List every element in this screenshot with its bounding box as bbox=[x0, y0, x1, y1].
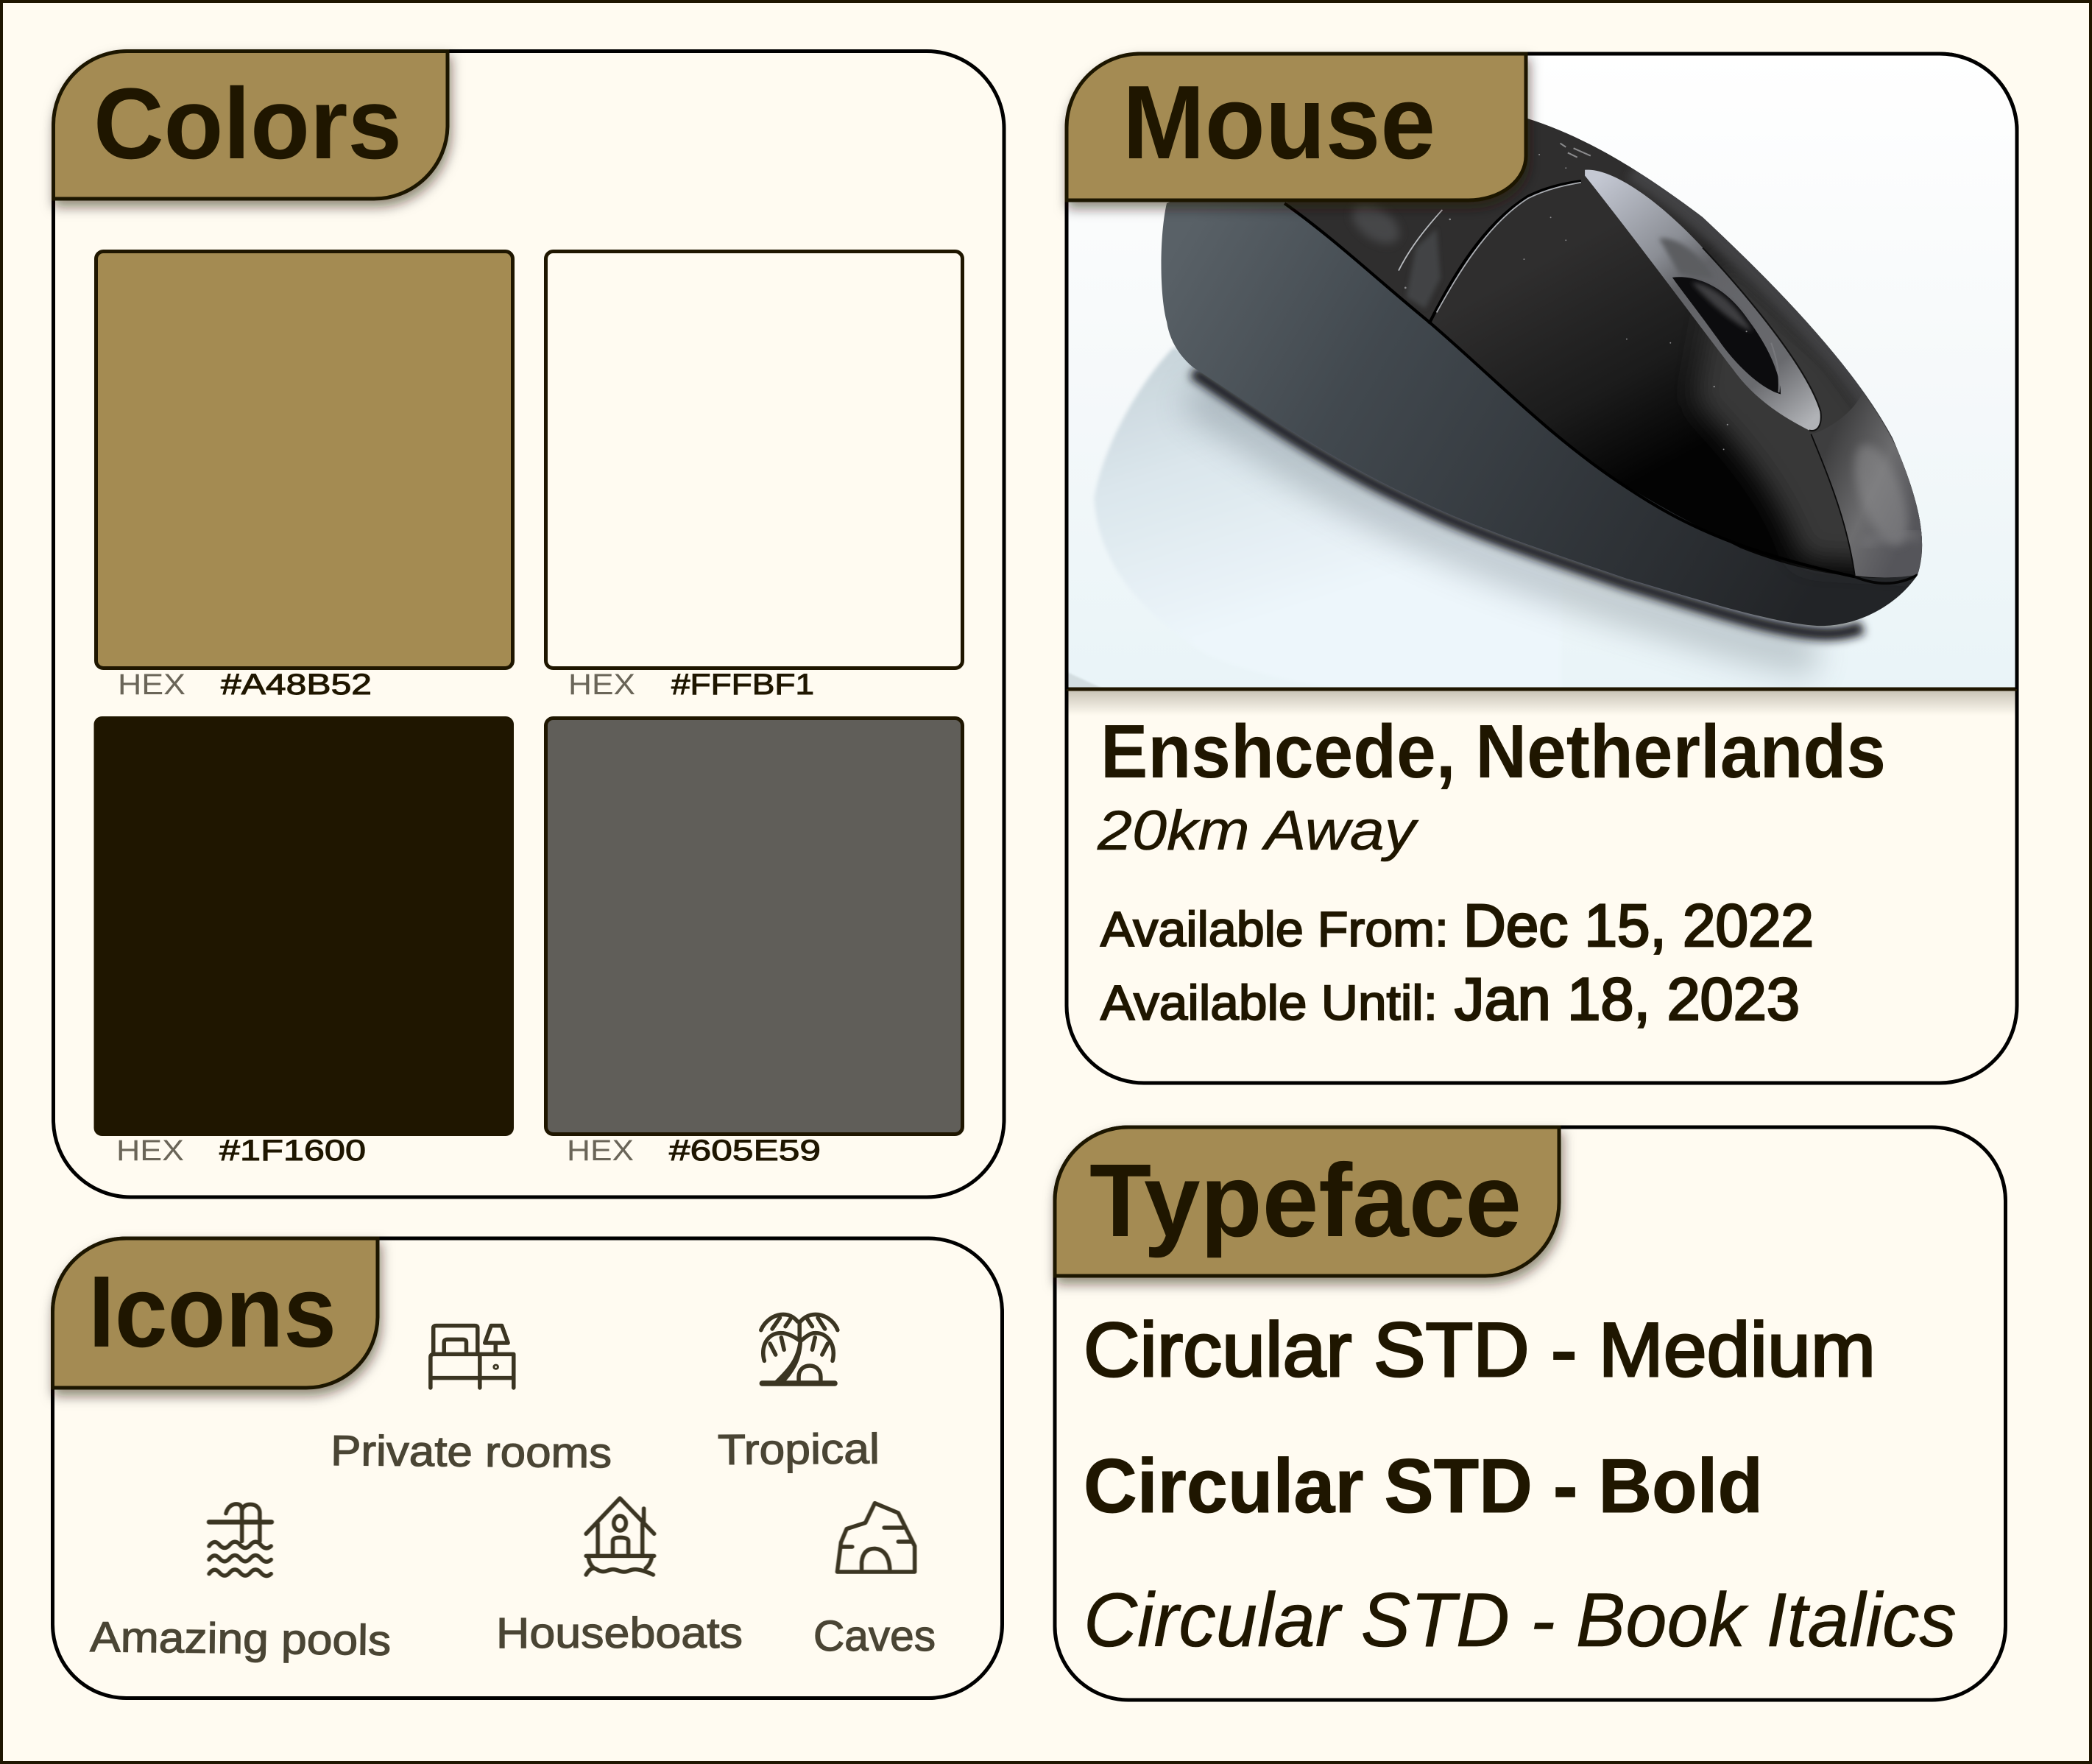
icon: amazing pools bbox=[209, 1504, 272, 1576]
icon: houseboats bbox=[586, 1498, 654, 1575]
image frame top edge bbox=[1067, 54, 2017, 689]
distance: 20km Away bbox=[1097, 800, 1418, 862]
heading tab: Mouse bbox=[1067, 54, 1526, 200]
swatch: #A48B52 bbox=[96, 252, 512, 701]
swatch: #A48B52: HEX bbox=[118, 668, 185, 701]
location heading: Enshcede, Netherlands bbox=[1100, 709, 1886, 794]
availability: until bbox=[1100, 966, 1800, 1033]
panel: icons bbox=[53, 1238, 1003, 1698]
icon: tropical bbox=[761, 1314, 838, 1383]
label: Amazing pools: Amazing pools bbox=[90, 1613, 392, 1665]
sample: bold: Circular STD - Bold bbox=[1084, 1444, 1763, 1529]
mouse body bbox=[1162, 119, 1922, 626]
swatch: #FFFBF1 bbox=[546, 252, 963, 701]
sample: italic: Circular STD - Book Italics bbox=[1084, 1578, 1957, 1663]
swatch: #FFFBF1: #FFFBF1 bbox=[671, 668, 814, 701]
heading tab: Typeface bbox=[1055, 1127, 1559, 1276]
divider under image bbox=[1067, 688, 2017, 691]
availability: until: Jan 18, 2023 bbox=[1455, 966, 1800, 1033]
heading tab: Icons bbox=[53, 1238, 378, 1388]
panel: mouse bbox=[1060, 44, 2024, 1083]
icon: caves bbox=[837, 1503, 915, 1572]
availability: from: Dec 15, 2022 bbox=[1463, 892, 1814, 959]
label: Tropical: Tropical bbox=[718, 1425, 880, 1474]
availability: from bbox=[1100, 892, 1814, 959]
swatch: #1F1600 bbox=[94, 716, 514, 1167]
label: Private rooms: Private rooms bbox=[331, 1427, 612, 1477]
sample: medium: Circular STD - Medium bbox=[1084, 1308, 1876, 1393]
swatch: #605E59: #605E59 bbox=[669, 1135, 821, 1167]
label: Caves: Caves bbox=[813, 1612, 936, 1660]
icon: private rooms bbox=[431, 1326, 514, 1388]
swatch: #605E59 bbox=[546, 719, 963, 1167]
heading tab: Colors: Colors bbox=[93, 68, 402, 180]
swatch: #A48B52: #A48B52 bbox=[221, 668, 372, 701]
panel: colors bbox=[53, 52, 1004, 1197]
label: Houseboats: Houseboats bbox=[496, 1609, 743, 1657]
heading tab: Icons: Icons bbox=[88, 1255, 336, 1369]
availability: until: Available Until: bbox=[1100, 976, 1438, 1031]
image: computer mouse photo bbox=[1060, 44, 2024, 702]
heading tab: Typeface: Typeface bbox=[1089, 1142, 1522, 1258]
image shadow bbox=[1068, 691, 2015, 716]
swatch: #1F1600: HEX bbox=[116, 1135, 184, 1167]
swatch: #FFFBF1: HEX bbox=[568, 668, 635, 701]
heading tab: Mouse: Mouse bbox=[1123, 64, 1435, 181]
swatch: #605E59: HEX bbox=[567, 1135, 634, 1167]
panel: typeface bbox=[1055, 1127, 2005, 1700]
swatch: #1F1600: #1F1600 bbox=[219, 1135, 366, 1167]
heading tab: Colors bbox=[53, 52, 448, 199]
availability: from: Available From: bbox=[1100, 902, 1449, 957]
